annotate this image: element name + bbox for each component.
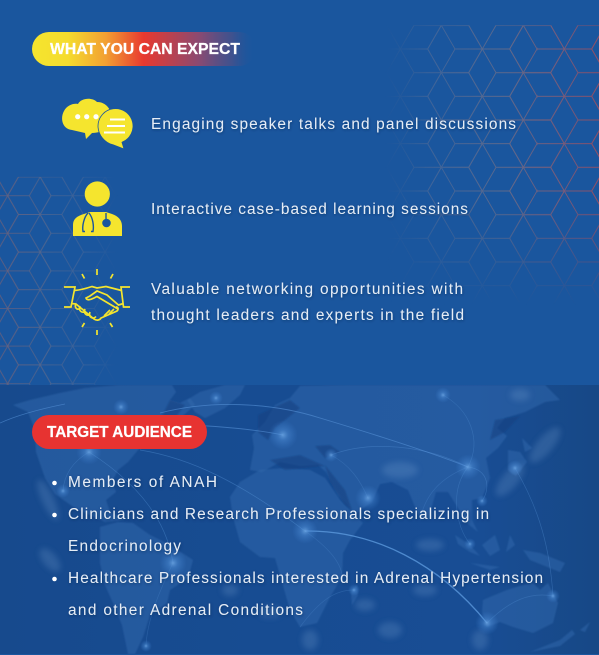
text: valuable networking: [151, 281, 464, 324]
bullet list: target audience: Healthcare Professionals interested in Adrenal Hypertension: [68, 570, 543, 587]
hexagon pattern: left: [0, 176, 108, 385]
heading pill: what you can expect: [32, 32, 256, 66]
text: engaging speaker talks: Engaging speaker talks and panel discussions: [151, 116, 516, 133]
hexagon pattern: right: [398, 25, 599, 297]
icon: doctor: [73, 181, 122, 236]
dark seas: [160, 400, 520, 510]
bullet list: target audience: Members of ANAH: [68, 474, 217, 491]
bullet list: target audience: [52, 474, 543, 619]
night lights: [33, 389, 565, 650]
icon: handshake: [64, 269, 130, 335]
icon: speech bubbles: [62, 99, 133, 149]
bottom panel: world map: [0, 385, 599, 654]
text: interactive case-based: Interactive case-based learning sessions: [151, 201, 468, 218]
bullet list: target audience: Clinicians and Research Professionals specializing in: [68, 506, 489, 523]
heading pill: target audience: TARGET AUDIENCE: [47, 424, 192, 441]
heading pill: what you can expect: WHAT YOU CAN EXPECT: [50, 41, 240, 58]
text: valuable networking: thought leaders and experts in the field: [151, 307, 464, 324]
top panel background: [0, 0, 599, 385]
bullet list: target audience: and other Adrenal Conditions: [68, 602, 303, 619]
flight arcs: [0, 395, 553, 646]
heading pill: target audience: [32, 415, 207, 449]
continents: [13, 385, 590, 654]
bullet list: target audience: Endocrinology: [68, 538, 181, 555]
glowing nodes: [56, 387, 560, 652]
text: valuable networking: Valuable networking opportunities with: [151, 281, 463, 298]
